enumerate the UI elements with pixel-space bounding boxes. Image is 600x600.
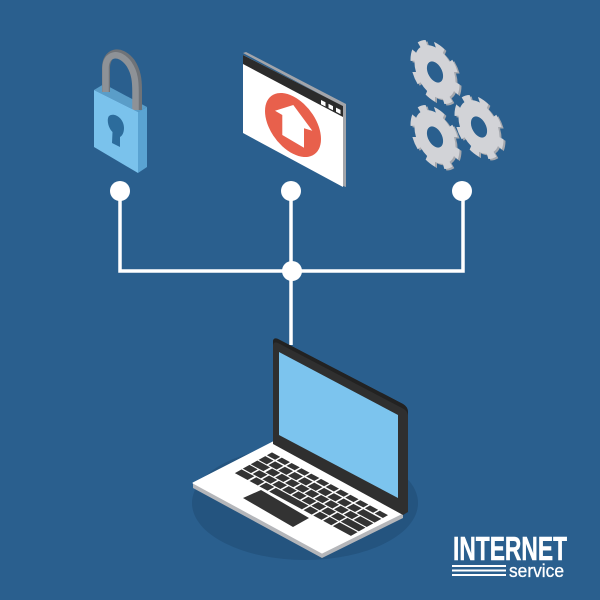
laptop screen [279,352,398,498]
padlock keyhole [108,115,124,147]
upload arrow [275,105,312,148]
node: gears [452,181,472,201]
lid top edge [273,338,408,415]
gear top [413,34,459,112]
subheading service: service [509,561,564,581]
laptop base [193,442,403,553]
laptop base edge [193,483,403,558]
red circle [265,82,321,168]
window buttons [321,100,340,114]
window title bar [243,55,343,117]
trackpad [243,490,309,527]
laptop [192,338,418,560]
laptop shadow [192,446,418,560]
gear right [457,89,503,167]
title: INTERNET service [452,530,567,581]
window page [243,55,343,187]
padlock shackle [106,53,138,110]
padlock front [94,90,138,173]
padlock top face [94,84,147,112]
node: central hub [282,261,302,281]
window side [343,104,346,187]
node: window [281,181,301,201]
connector network [110,181,472,345]
node: lock [110,181,130,201]
icon: browser window [243,52,346,187]
padlock side [138,107,147,173]
gear bottom left [413,99,459,177]
icon: padlock [94,53,147,173]
window top edge [243,52,346,108]
stripes [452,565,506,576]
keyboard [235,452,388,536]
laptop screen lid [273,338,408,515]
icon: gears [413,34,503,177]
